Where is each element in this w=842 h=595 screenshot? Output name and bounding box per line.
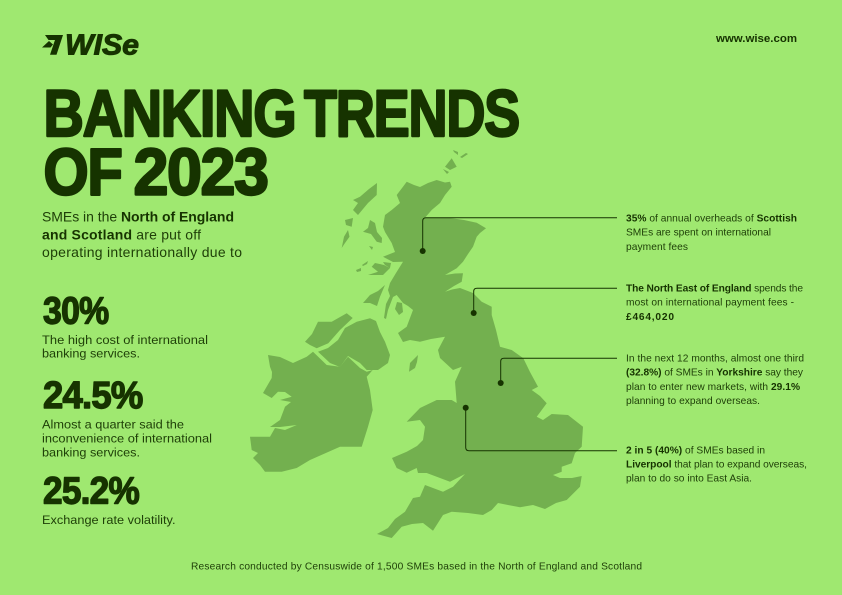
map: Donegal <box>305 313 353 348</box>
map: Skye <box>363 220 382 243</box>
title: BANKING <box>44 76 296 150</box>
title: 2023 <box>134 134 268 208</box>
map: Tiree and Coll <box>356 261 368 272</box>
stat: 30%: banking services. <box>42 347 140 361</box>
intro text: operating internationally due to <box>42 244 242 260</box>
stat: 24.5%: banking services. <box>42 446 140 460</box>
map: Northern Ireland <box>318 318 390 370</box>
map: Great Britain <box>377 180 583 538</box>
callout: North East: most on international payment fees - <box>626 298 794 309</box>
intro text: SMEs in the North of England <box>42 208 234 224</box>
stat: 24.5%: inconvenience of international <box>42 432 212 446</box>
callout: North East: £464,020 <box>626 312 674 323</box>
map: Lewis <box>353 183 377 215</box>
website url: www.wise.com <box>715 33 797 45</box>
callout: North East: The North East of England spends the <box>626 284 803 295</box>
map: Orkney <box>443 158 457 174</box>
stat: 24.5%: 24.5% <box>43 375 143 417</box>
callout: Yorkshire: (32.8%) of SMEs in Yorkshire say they <box>626 368 803 379</box>
callout: Liverpool: plan to do so into East Asia. <box>626 474 752 485</box>
title <box>44 76 519 208</box>
map: Shetland <box>453 150 468 158</box>
map: Arran <box>395 302 403 315</box>
leader line: Liverpool <box>463 405 617 451</box>
callout: Yorkshire: plan to enter new markets, with 29.1% <box>626 382 800 393</box>
map: Isle of Man <box>409 355 418 372</box>
map: Islay and Jura <box>363 285 385 306</box>
stat: 24.5% <box>42 375 212 460</box>
title: TRENDS <box>304 76 519 150</box>
title: OF <box>44 134 122 208</box>
map: UK and Ireland <box>250 150 583 538</box>
map: Republic of Ireland <box>250 352 373 472</box>
leader line: Yorkshire <box>498 358 617 386</box>
leader line: Scotland <box>420 218 617 254</box>
footer note: Research conducted by Censuswide of 1,500 SMEs based in the North of England and Scotland <box>191 562 642 573</box>
callout: Liverpool: Liverpool that plan to expand overseas, <box>626 460 807 470</box>
icon: Wise flag <box>42 35 63 55</box>
callout: Scotland: payment fees <box>626 242 688 253</box>
intro text: and Scotland are put off <box>42 226 201 242</box>
callout: Scotland: 35% of annual overheads of Scottish <box>626 214 797 225</box>
stat: 25.2% <box>42 470 176 527</box>
stat: 25.2%: Exchange rate volatility. <box>42 513 176 527</box>
callout: Liverpool: 2 in 5 (40%) of SMEs based in <box>626 445 765 456</box>
stat: 24.5%: Almost a quarter said the <box>42 417 184 431</box>
stat: 25.2%: 25.2% <box>43 470 139 512</box>
logo wordmark: WISe <box>65 30 139 62</box>
map: Uist <box>342 218 353 248</box>
leader line: North East <box>471 288 617 316</box>
callout: Yorkshire: planning to expand overseas. <box>626 396 760 407</box>
stat: 30%: The high cost of international <box>42 333 208 347</box>
map: Small Isles <box>369 246 373 250</box>
callout: Yorkshire: In the next 12 months, almost one third <box>626 354 804 365</box>
stat: 30%: 30% <box>43 290 109 332</box>
logo: Wise <box>42 30 139 62</box>
stat: 30% <box>42 290 208 361</box>
map: Mull <box>368 262 391 275</box>
callout: Scotland: SMEs are spent on international <box>626 228 771 239</box>
